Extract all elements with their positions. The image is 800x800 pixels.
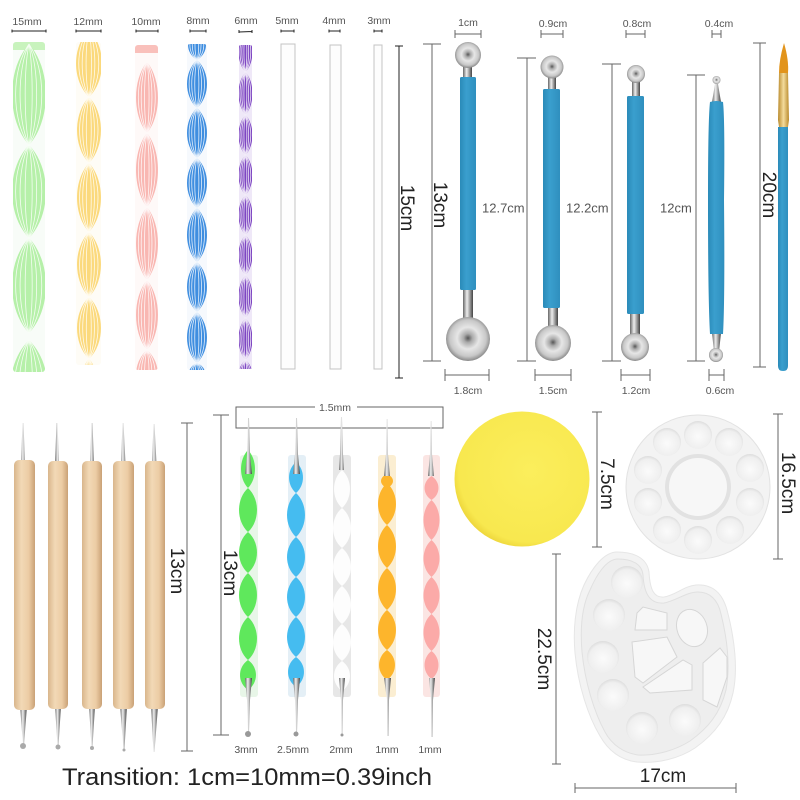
rod: green 15mm [13,42,45,372]
palette disc with wells [626,415,770,559]
dimension: 13cm wooden: 13cm [166,548,187,594]
dimensions: top ball sizes: 1cm [458,17,478,29]
dimensions: bottom ball sizes [445,369,735,397]
dimensions: tool lengths: 12.2cm [566,200,609,216]
palette body with wells [574,552,735,762]
tip size labels: 2mm [329,744,353,756]
dimensions: tool lengths [423,43,779,367]
dimension: 22.5cm: 22.5cm [533,628,554,690]
rod: clear 3mm [374,45,382,369]
conversion note: Transition: 1cm=10mm=0.39inch [62,764,432,791]
dimensions: top ball sizes: 0.4cm [705,18,734,30]
tool: wooden 2 [48,423,68,750]
tool: orange dotting [378,419,396,736]
dimensions: bottom ball sizes: 1.5cm [539,385,568,397]
panel: sponge [454,412,617,547]
dimensions: bottom ball sizes: 1.8cm [454,385,483,397]
tool: wooden 1 [14,423,35,749]
tool: wooden 3 [82,423,102,750]
panel: artist palette [533,552,736,793]
rod: purple 6mm [239,45,252,369]
size bracket: 1.5mm [236,402,443,428]
size labels for rods: 5mm [275,15,299,27]
dimensions: tool lengths: 12.7cm [482,200,525,216]
dimensions: bottom ball sizes: 0.6cm [706,385,735,397]
dimension: 13cm wooden [166,423,193,751]
dimension: 7.5cm [592,412,617,547]
tool: ball stylus 4 [708,76,724,362]
tool: ball stylus 2 [535,56,571,361]
dimension: 16.5cm: 16.5cm [777,452,798,514]
dimension: 13cm acrylic [213,415,240,735]
rod: pink 10mm [135,45,158,400]
size labels for rods: 6mm [234,15,258,27]
tool: green dotting [239,418,258,737]
icon: yellow sponge [454,412,590,546]
dimension: 16.5cm [773,414,798,559]
panel: round palette [626,414,798,559]
dimensions: top ball sizes [455,17,734,38]
tip size labels: 1mm [375,744,399,756]
tool: wooden 5 [145,424,165,752]
panel: acrylic rods [10,15,417,440]
size labels for rods: 12mm [73,16,103,28]
tool: wooden 4 [113,423,134,752]
size labels for rods: 4mm [322,15,346,27]
tool: ball stylus 3 [621,65,649,361]
dimension: 22.5cm [533,554,561,764]
rod: clear 4mm [330,45,341,369]
tool: white dotting [333,417,351,736]
size labels for rods: 10mm [131,16,161,28]
panel: wooden dotting tools [14,423,193,752]
dimensions: tool lengths: 12cm [660,200,692,216]
dimension: 13cm acrylic: 13cm [219,550,240,596]
dimension: 17cm [575,766,736,793]
dimension: 15cm: 15cm [396,185,417,231]
dimension: 7.5cm: 7.5cm [596,458,617,510]
tool: blue dotting [287,418,306,736]
panel: ball stylus tools [423,17,789,397]
dimensions: tool lengths: 13cm [429,182,450,228]
tip size labels: 1mm [418,744,442,756]
tool: paint brush [778,43,789,371]
size labels for rods: 8mm [186,15,210,27]
dimensions: tool lengths: 20cm [758,172,779,218]
tip size labels: 2.5mm [277,744,309,756]
size bracket: 1.5mm: 1.5mm [319,402,351,414]
dimensions: top ball sizes: 0.8cm [623,18,652,30]
dimensions: bottom ball sizes: 1.2cm [622,385,651,397]
rod: blue 8mm [187,30,207,383]
rod: yellow 12mm [76,42,101,365]
size labels for rods: 3mm [367,15,391,27]
dimension: 17cm: 17cm [640,766,686,787]
size labels for rods: 15mm [12,16,42,28]
dimensions: top ball sizes: 0.9cm [539,18,568,30]
panel: acrylic dotting tools [213,402,443,756]
dimension: 15cm [395,46,417,378]
tool: ball stylus 1 [446,42,490,361]
tip size labels: 3mm [234,744,258,756]
rod: clear 5mm [281,44,295,369]
tip size labels [234,744,442,756]
tool: pink dotting [423,421,440,737]
size labels for rods [12,15,391,33]
